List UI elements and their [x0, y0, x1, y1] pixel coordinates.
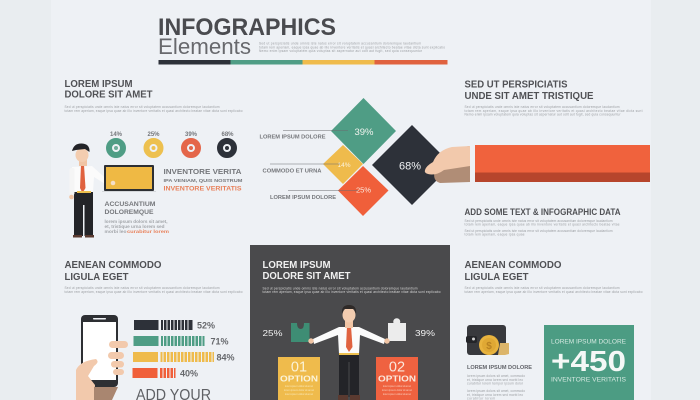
panel: add some text	[464, 207, 621, 236]
donut charts	[109, 132, 234, 155]
heading: AENEAN COMMODO	[64, 259, 162, 271]
label: lorem ipsum dolore bottom: LOREM IPSUM DOLORE	[270, 195, 337, 201]
title: Elements	[158, 34, 251, 59]
icon: businessman	[308, 305, 390, 400]
card: option 01: lorem ipsum dolor sit amet	[284, 388, 314, 392]
panel: wallet and counter	[464, 259, 643, 400]
text block: totam rem aperiam, eaque ipsa quae ab illo inventore veritatis et quasi architecto beatae vitae dicta sunt explicabo	[262, 290, 441, 294]
label: lorem ipsum dolore: LOREM IPSUM DOLORE	[467, 365, 532, 371]
label: commodo et urna: COMMODO ET URNA	[262, 168, 322, 174]
donut charts: 14%	[110, 132, 123, 138]
heading	[464, 78, 594, 102]
card: option 02: lorem ipsum dolor sit amet	[383, 392, 411, 396]
heading: LOREM IPSUM	[262, 260, 330, 271]
callout: inventore	[164, 169, 243, 192]
diamond: 39%	[331, 98, 396, 164]
text block: totam rem aperiam, eaque ipsa quae ab illo inventore veritatis et quasi architecto beatae vitae dicta sunt	[464, 109, 643, 113]
text block	[262, 286, 441, 294]
text block	[467, 374, 525, 400]
panel: phone bars	[64, 259, 243, 400]
icon: green puzzle piece	[291, 323, 310, 342]
callout: +450 counter: LOREM IPSUM DOLORE	[551, 338, 627, 346]
card: option 01: 01	[291, 360, 307, 376]
icon: hand and red sleeve	[425, 145, 650, 183]
text block: Sed ut perspiciatis unde omnis iste natus error sit voluptatem accusantium doloremque laudantium	[464, 105, 620, 109]
card: option 01: lorem ipsum dolor sit amet	[285, 384, 313, 388]
diamond: 68%	[372, 125, 452, 205]
text block: et, tristique urna lorem sed morbi leo	[467, 378, 523, 382]
text block	[464, 219, 620, 236]
callout: inventore: IPA VENIAM, QUIS NOSTRUM	[164, 178, 243, 183]
donut charts: 68%	[221, 132, 234, 138]
header description text: totam rem aperiam, eaque ipsa quae ab illo inventore veritatis et quasi architecto beatae vitae dicta sunt explicabo	[259, 46, 445, 50]
text block: Sed ut perspiciatis unde omnis iste natus error sit voluptatem accusantium doloremque laudantium	[464, 219, 613, 223]
diamond: 25%: 25%	[356, 186, 371, 194]
callout: accusantium: et, tristique urna lorem sed	[104, 224, 165, 229]
callout: accusantium: curabitur lorem	[127, 229, 169, 234]
header description text: Nemo enim ipsam voluptatem quia voluptas sit aspernatur aut odit aut fugit, sed quia consequuntur	[259, 49, 423, 53]
text block: totam rem aperiam, eaque ipsa quae ab illo inventore veritatis et quasi architecto beatae vitae dicta sunt explicabo	[464, 290, 643, 294]
heading: LIGULA EGET	[64, 271, 129, 283]
panel: diamond chart	[260, 98, 452, 216]
callout: accusantium: lorem ipsum dolors sit amet,	[104, 219, 168, 224]
bar chart: 71%	[210, 336, 229, 346]
text block	[64, 105, 243, 113]
title colour bar	[158, 60, 448, 64]
card: option 02: lorem ipsum dolor sit amet	[382, 388, 412, 392]
donut charts: 39%	[185, 132, 198, 138]
text block: curabitur lorem tempor ipsum dolor	[467, 382, 524, 386]
text block: Sed ut perspiciatis unde omnis iste natus error sit voluptatem accusantium doloremque laudantium	[64, 105, 220, 109]
icon: wallet with coin: $	[486, 341, 492, 352]
heading: DOLORE SIT AMET	[262, 271, 350, 282]
label: lorem ipsum dolore top	[260, 130, 348, 140]
label: commodo et urna	[262, 164, 340, 174]
label: 25%: 25%	[262, 328, 283, 338]
heading: SED UT PERSPICIATIS	[464, 78, 568, 90]
panel: sed ut perspiciatis	[464, 78, 643, 116]
callout: inventore: INVENTORE VERITA	[164, 169, 242, 176]
header description text	[259, 42, 445, 53]
diamond: 39%: 39%	[354, 127, 374, 138]
text block: totam rem aperiam, eaque ipsa quae	[464, 232, 525, 236]
text block	[64, 286, 243, 294]
text block: lorem ipsum dolors sit amet, commodo	[467, 389, 525, 393]
card: option 01: OPTION	[280, 374, 318, 384]
bar chart: 84%	[216, 352, 235, 362]
heading	[262, 260, 350, 282]
heading: LIGULA EGET	[464, 271, 529, 283]
diamond: 14%: 14%	[337, 162, 351, 169]
heading: DOLORE SIT AMET	[64, 88, 153, 100]
bar chart	[132, 320, 235, 378]
card: option 01: lorem ipsum dolor sit amet	[285, 392, 313, 396]
text block: Sed ut perspiciatis unde omnis iste natus error sit voluptatem accusantium doloremque laudantium	[262, 286, 418, 290]
icon: laptop screen	[102, 165, 156, 192]
label: lorem ipsum dolore bottom	[270, 190, 358, 201]
bar chart: 52%	[197, 320, 215, 330]
header description text: Sed ut perspiciatis unde omnis iste natus error sit voluptatem accusantium doloremque laudantium	[259, 42, 421, 46]
card: option 02: 02	[389, 360, 405, 376]
text block: Sed ut perspiciatis unde omnis iste natus error sit voluptatem accusantium doloremque laudantium	[464, 229, 613, 233]
icon: phone in hand	[76, 315, 128, 400]
heading	[464, 259, 562, 283]
text block: totam rem aperiam, eaque ipsa quae ab illo inventore veritatis et quasi architecto beatae vitae dicta sunt explicabo	[64, 290, 243, 294]
callout: +450 counter: +450	[551, 346, 626, 378]
card: option 02	[376, 357, 418, 400]
heading	[64, 259, 162, 283]
callout: accusantium: DOLOREMQUE	[104, 209, 154, 216]
diamond: 68%: 68%	[399, 160, 421, 172]
title	[158, 14, 336, 59]
text block: totam rem aperiam, eaque ipsa quae ab illo inventore veritatis et quasi architecto beatae vitae dicta sunt explicabo	[64, 109, 243, 113]
icon: presenter	[69, 143, 112, 238]
text block: Sed ut perspiciatis unde omnis iste natus error sit voluptatem accusantium doloremque laudantium	[464, 286, 620, 290]
callout: +450 counter: INVENTORE VERITATIS	[551, 376, 627, 384]
title: INFOGRAPHICS	[158, 14, 336, 41]
heading: LOREM IPSUM	[64, 78, 133, 90]
icon: wallet with coin	[466, 325, 509, 355]
card: option 02: lorem ipsum dolor sit amet	[383, 384, 411, 388]
callout: accusantium: morbi leo	[104, 229, 127, 234]
callout: accusantium: ACCUSANTIUM	[104, 201, 156, 208]
bar chart: 40%	[180, 368, 198, 378]
text block: et, tristique urna lorem sed morbi leo	[467, 393, 523, 397]
diamond: 25%	[338, 166, 388, 216]
heading: UNDE SIT AMET TRISTIQUE	[464, 90, 594, 102]
text block: totam rem aperiam, eaque ipsa quae ab illo inventore veritatis et quasi architecto beatae vitae	[464, 222, 620, 226]
callout: inventore: INVENTORE VERITATIS	[164, 186, 242, 192]
diamond: 14%	[323, 145, 363, 184]
text block: Sed ut perspiciatis unde omnis iste natus error sit voluptatem accusantium doloremque laudantium	[64, 286, 220, 290]
text block	[464, 105, 643, 116]
label: 39%: 39%	[415, 328, 436, 338]
text block: lorem ipsum dolors sit amet, commodo	[467, 374, 525, 378]
card: option 01	[278, 357, 320, 400]
heading: AENEAN COMMODO	[464, 259, 562, 271]
callout: +450 counter	[544, 325, 634, 400]
panel: lorem ipsum people and donuts	[64, 78, 243, 238]
icon: white puzzle piece	[388, 318, 406, 341]
donut charts: 25%	[147, 132, 160, 138]
text block	[464, 286, 643, 294]
heading	[64, 78, 153, 100]
label: lorem ipsum dolore top: LOREM IPSUM DOLORE	[260, 134, 326, 140]
card: option 02: OPTION	[378, 374, 416, 384]
callout: accusantium	[104, 201, 169, 234]
panel: dark lorem ipsum	[250, 245, 450, 400]
heading: ADD SOME TEXT & INFOGRAPHIC DATA	[464, 207, 621, 218]
text block: Nemo enim ipsam voluptatem quia voluptas sit aspernatur aut odit aut fugit, sed quia consequuntur	[464, 112, 621, 116]
